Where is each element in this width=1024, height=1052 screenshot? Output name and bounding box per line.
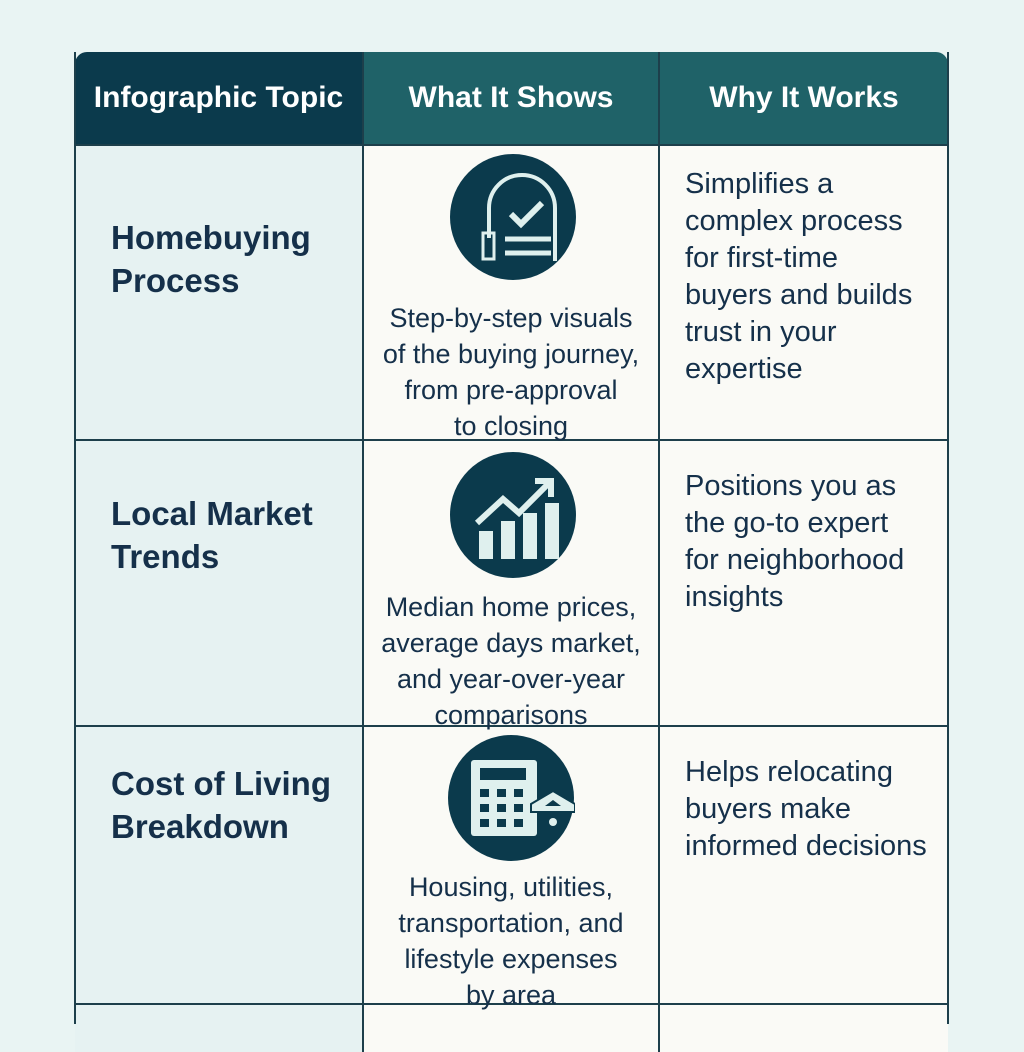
row 1 why: buyers and builds bbox=[685, 279, 912, 311]
row 1 topic bbox=[75, 146, 364, 441]
text: by area bbox=[466, 980, 556, 1010]
row 2 why: the go-to expert bbox=[685, 507, 888, 539]
icon: calculator bbox=[448, 735, 575, 861]
row 2 why: Positions you as bbox=[685, 470, 896, 502]
header: what it shows bbox=[364, 52, 660, 146]
text bbox=[398, 872, 624, 1010]
text: to closing bbox=[454, 411, 568, 441]
row 3 what bbox=[364, 727, 660, 1005]
row 1 why bbox=[660, 146, 948, 441]
icon: chart bbox=[450, 452, 576, 578]
row 1 topic: Homebuying bbox=[111, 219, 311, 256]
row 2 why bbox=[660, 441, 948, 727]
row 3 topic: Breakdown bbox=[111, 808, 289, 845]
header: why it works bbox=[660, 52, 948, 146]
text: lifestyle expenses bbox=[404, 944, 618, 974]
row 1 why: for first-time bbox=[685, 242, 838, 274]
row 3 why: buyers make bbox=[685, 793, 851, 825]
row 4 partial bbox=[75, 1005, 364, 1052]
text: from pre-approval bbox=[404, 375, 618, 405]
row 3 topic bbox=[75, 727, 364, 1005]
row 3 topic: Cost of Living bbox=[111, 765, 331, 802]
row 3 why: informed decisions bbox=[685, 830, 927, 862]
row 1 topic: Process bbox=[111, 262, 239, 299]
row 2 topic: Local Market bbox=[111, 495, 313, 532]
header: topic: Infographic Topic bbox=[94, 81, 343, 114]
text: Housing, utilities, bbox=[409, 872, 613, 902]
text: and year-over-year bbox=[397, 664, 625, 694]
row 2 what bbox=[364, 441, 660, 727]
row 1 why: complex process bbox=[685, 205, 903, 237]
text: Step-by-step visuals bbox=[389, 303, 633, 333]
row 3 why: Helps relocating bbox=[685, 756, 893, 788]
text: comparisons bbox=[434, 700, 588, 730]
row 2 topic: Trends bbox=[111, 538, 219, 575]
text bbox=[383, 303, 639, 441]
row 2 topic bbox=[75, 441, 364, 727]
header: topic bbox=[75, 52, 364, 146]
header: why it works: Why It Works bbox=[709, 81, 899, 114]
text bbox=[381, 592, 641, 730]
row 2 why: insights bbox=[685, 581, 783, 613]
row 1 what bbox=[364, 146, 660, 441]
row 1 why: expertise bbox=[685, 353, 803, 385]
row 3 why bbox=[660, 727, 948, 1005]
text: average days market, bbox=[381, 628, 641, 658]
row 2 why: for neighborhood bbox=[685, 544, 904, 576]
text: transportation, and bbox=[398, 908, 624, 938]
row 1 why: trust in your bbox=[685, 316, 836, 348]
header: what it shows: What It Shows bbox=[408, 81, 614, 114]
icon: checklist bbox=[450, 154, 576, 280]
text: of the buying journey, bbox=[383, 339, 639, 369]
text: Median home prices, bbox=[386, 592, 636, 622]
row 1 why: Simplifies a bbox=[685, 168, 833, 200]
